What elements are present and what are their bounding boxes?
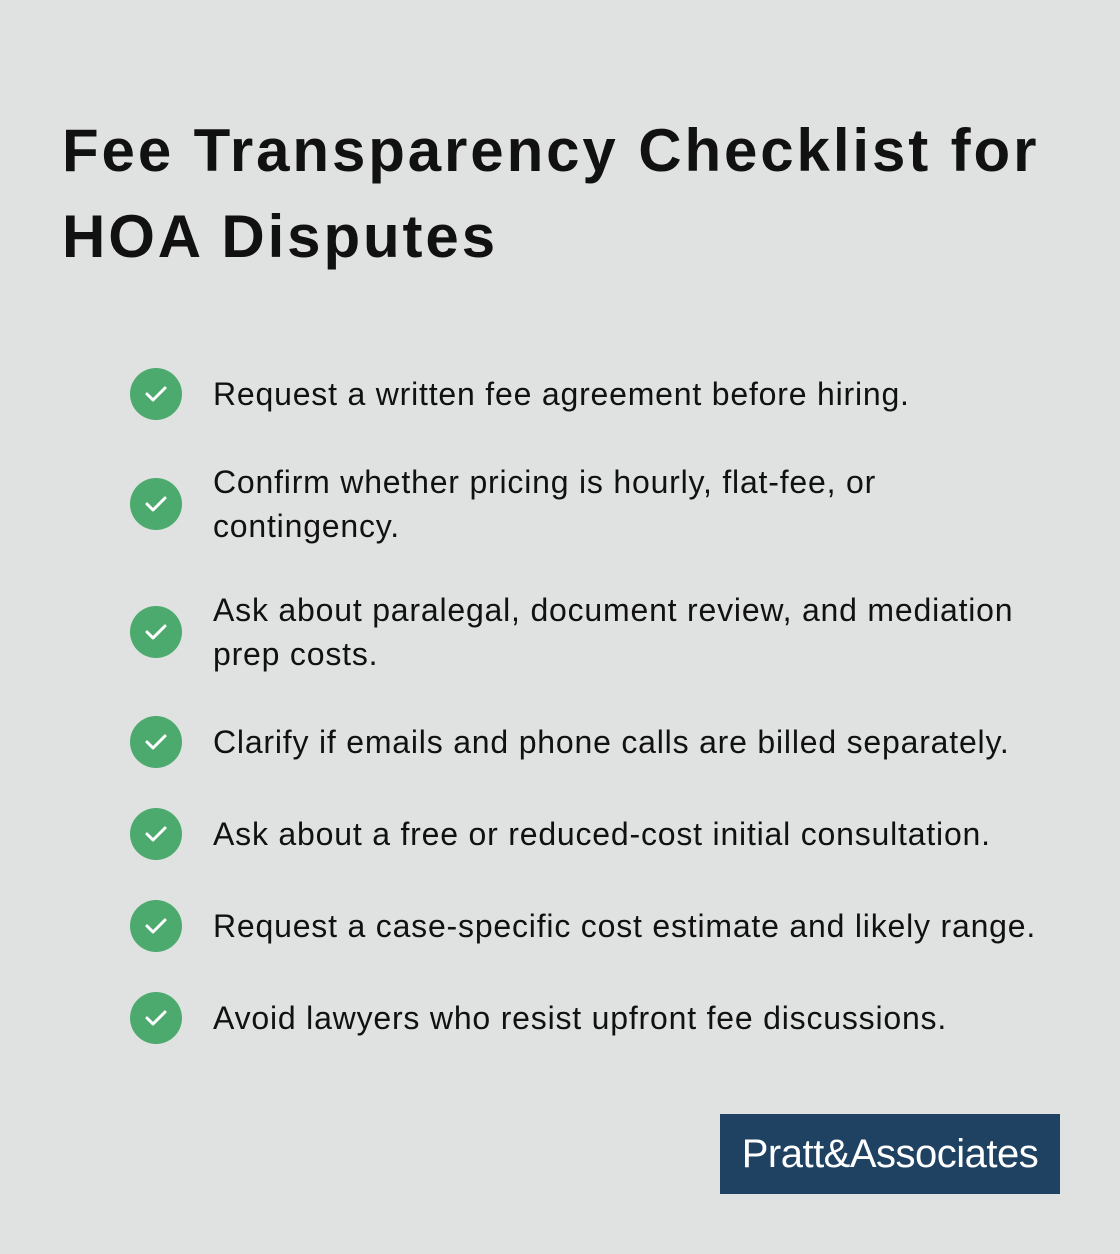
item 5 [130, 808, 991, 860]
item 2: Confirm whether pricing is hourly, flat-fee, or [213, 464, 876, 500]
title [62, 117, 1039, 270]
item 7: Avoid lawyers who resist upfront fee discussions. [213, 1000, 947, 1036]
item 3: prep costs. [213, 636, 378, 672]
item 7 [130, 992, 947, 1044]
item 2: contingency. [213, 508, 400, 544]
item 4: Clarify if emails and phone calls are billed separately. [213, 724, 1010, 760]
item 5: Ask about a free or reduced-cost initial consultation. [213, 816, 991, 852]
title: HOA Disputes [62, 203, 498, 270]
title: Fee Transparency Checklist for [62, 117, 1039, 184]
item 1: Request a written fee agreement before hiring. [213, 376, 910, 412]
logo: Pratt&Associates [742, 1132, 1038, 1176]
item 6 [130, 900, 1036, 952]
item 3 [130, 592, 1013, 672]
logo [720, 1114, 1060, 1194]
item 2 [130, 464, 876, 544]
item 4 [130, 716, 1010, 768]
checklist [130, 368, 1036, 1044]
item 6: Request a case-specific cost estimate and likely range. [213, 908, 1036, 944]
item 1 [130, 368, 910, 420]
item 3: Ask about paralegal, document review, and mediation [213, 592, 1013, 628]
